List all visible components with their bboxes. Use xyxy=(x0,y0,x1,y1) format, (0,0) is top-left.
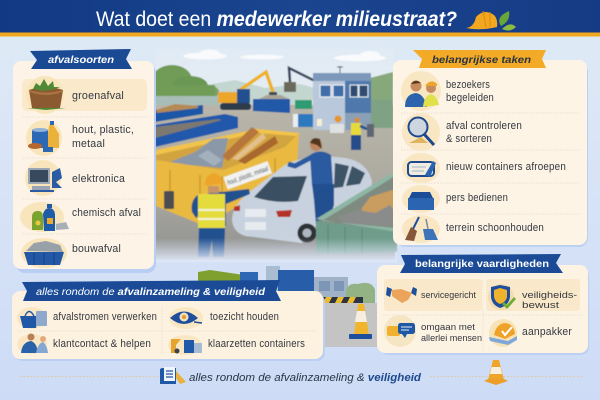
item: elektronica xyxy=(25,160,126,196)
item: afvalstromen verwerken xyxy=(17,307,157,329)
blue bins xyxy=(293,114,313,127)
task: terrein schoonhouden: terrein schoonhouden xyxy=(446,222,544,234)
item: hout, plastic, metaal: hout, plastic, xyxy=(72,124,134,136)
skill: servicegericht xyxy=(386,287,476,303)
fence xyxy=(155,96,220,110)
icon: clipboard and pencil xyxy=(160,367,186,384)
ribbon heading: belangrijke vaardigheden xyxy=(400,254,563,273)
item: afvalstromen verwerken: afvalstromen verwerken xyxy=(53,311,157,323)
task: bezoekers begeleiden: begeleiden xyxy=(446,92,494,104)
ribbon heading: belangrijkse taken: belangrijkse taken xyxy=(432,54,531,66)
rubble and blocks xyxy=(170,138,228,168)
worker with car xyxy=(288,138,334,225)
skill: servicegericht: servicegericht xyxy=(421,290,476,301)
icon: traffic cone xyxy=(349,304,372,339)
task: afval controleren & sorteren xyxy=(402,113,522,151)
skill: aanpakker xyxy=(489,319,572,347)
panel: belangrijkse taken xyxy=(393,50,588,247)
ribbon heading: afvalsoorten xyxy=(30,49,132,69)
item: klantcontact & helpen xyxy=(17,334,151,354)
panel: afvalsoorten xyxy=(13,49,156,273)
task: nieuw containers afroepen: nieuw containers afroepen xyxy=(446,161,566,173)
container label: hout, plastic, metaal xyxy=(227,165,270,187)
skill: aanpakker: aanpakker xyxy=(522,326,572,338)
task: afval controleren & sorteren: afval controleren xyxy=(446,120,522,132)
item: klantcontact & helpen: klantcontact & helpen xyxy=(53,338,151,350)
clouds xyxy=(183,50,386,62)
trees xyxy=(152,65,393,105)
task: pers bedienen xyxy=(402,185,508,213)
ribbon heading: belangrijkse taken xyxy=(413,50,546,68)
yellow container xyxy=(156,127,299,224)
background worker xyxy=(351,117,374,150)
green bin xyxy=(295,100,312,109)
container label xyxy=(223,161,272,189)
lower scene: buildings, barrier and cone xyxy=(198,266,379,347)
title: Wat doet een medewerker milieustraat? xyxy=(96,8,457,31)
ribbon heading xyxy=(22,280,281,301)
item: groenafval: groenafval xyxy=(72,90,124,102)
ribbon heading: afvalsoorten: afvalsoorten xyxy=(48,54,114,66)
item: toezicht houden: toezicht houden xyxy=(210,311,279,323)
task: pers bedienen: pers bedienen xyxy=(446,192,508,204)
item: bouwafval: bouwafval xyxy=(72,243,121,255)
illustration: recycling yard scene xyxy=(152,44,397,262)
item: elektronica: elektronica xyxy=(72,173,126,185)
header banner xyxy=(0,0,600,36)
skill: omgaan met allerlei mensen xyxy=(384,315,482,347)
task: bezoekers begeleiden xyxy=(401,71,494,111)
task: nieuw containers afroepen xyxy=(402,153,566,183)
ground xyxy=(155,105,395,260)
panel: alles rondom de afvalinzameling & veiligheid xyxy=(12,280,325,361)
skill: omgaan met allerlei mensen: omgaan met xyxy=(421,322,475,333)
item: klaarzetten containers xyxy=(168,335,305,355)
task: bezoekers begeleiden: bezoekers xyxy=(446,79,490,91)
item: klaarzetten containers: klaarzetten containers xyxy=(208,338,305,350)
skill: veiligheidsbewust: veiligheids- xyxy=(522,290,577,301)
item: chemisch afval: chemisch afval xyxy=(72,207,141,219)
item: hout, plastic, metaal: metaal xyxy=(72,138,105,150)
task: afval controleren & sorteren: & sorteren xyxy=(446,133,492,145)
icon: hard hat and leaves xyxy=(466,11,516,31)
item: bouwafval xyxy=(21,238,121,268)
excavator xyxy=(218,72,277,110)
skill: omgaan met allerlei mensen: allerlei mensen xyxy=(421,333,482,344)
site office xyxy=(313,66,393,133)
task: terrein schoonhouden xyxy=(402,215,544,243)
panel: belangrijke vaardigheden xyxy=(377,254,589,355)
skill: veiligheidsbewust: bewust xyxy=(522,300,559,311)
item: groenafval xyxy=(26,76,124,114)
far blue container xyxy=(253,99,290,113)
skill: veiligheidsbewust xyxy=(488,284,577,311)
footer text: alles rondom de afvalinzameling & veiligheid xyxy=(189,372,421,384)
ribbon heading: alles rondom de afvalinzameling & veiligheid xyxy=(36,286,266,298)
green container front right xyxy=(316,173,397,254)
ribbon heading: belangrijke vaardigheden: belangrijke vaardigheden xyxy=(415,258,549,270)
icon: small traffic cone xyxy=(484,360,508,385)
item: hout, plastic, metaal xyxy=(26,120,134,156)
worker in safety vest xyxy=(192,173,250,257)
item: chemisch afval xyxy=(20,202,141,232)
blue containers left xyxy=(155,104,238,147)
crane arm xyxy=(289,68,315,82)
footer line xyxy=(20,360,582,385)
car xyxy=(232,157,372,243)
scene bottom fade xyxy=(155,238,397,262)
item: toezicht houden xyxy=(169,307,279,329)
